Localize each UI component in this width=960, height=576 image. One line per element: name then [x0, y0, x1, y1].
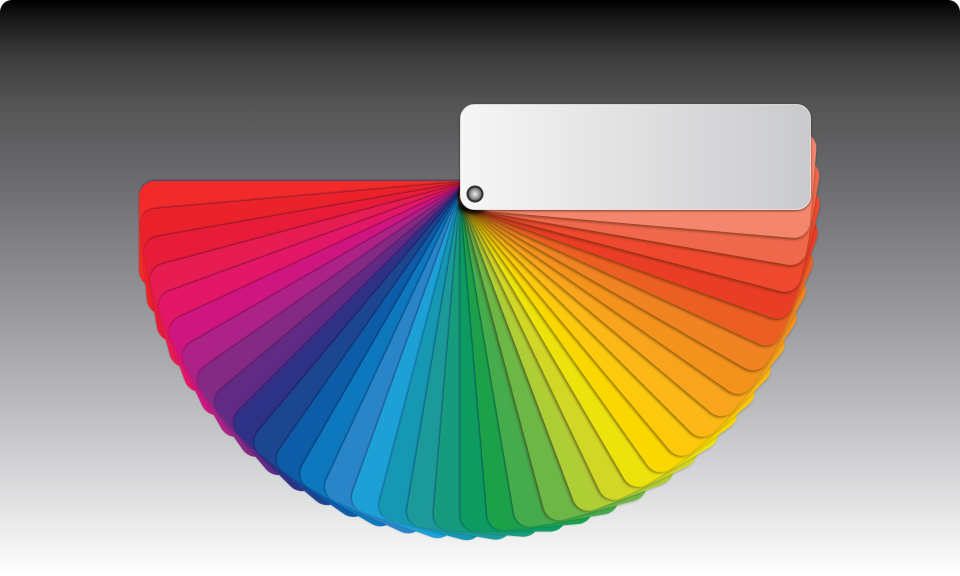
card: sky blue: [348, 176, 566, 543]
card: deep orange: [455, 109, 812, 376]
card: coral: [458, 103, 822, 268]
card: lemon: [455, 136, 724, 493]
card: orange: [454, 112, 803, 400]
card: purple magenta: [191, 175, 540, 463]
card: red orange: [457, 103, 823, 295]
card: golden yellow: [454, 125, 761, 462]
colour fan: [139, 103, 823, 544]
card: red: [139, 181, 490, 287]
swatch body: [460, 104, 810, 210]
card: leaf green: [457, 157, 650, 524]
blank swatch card: [458, 104, 810, 213]
card: rose red: [147, 178, 513, 371]
card: mid green: [458, 165, 621, 529]
card: yellow green: [455, 143, 702, 505]
rivet: [466, 186, 484, 202]
card: lime: [456, 149, 678, 515]
card: burnt orange: [455, 106, 818, 351]
card: cyan blue: [376, 177, 567, 544]
hub shadow: [458, 201, 488, 213]
card: magenta: [177, 175, 534, 443]
card: purple: [208, 175, 545, 482]
card: magenta rose: [164, 176, 527, 420]
card: light orange: [454, 116, 791, 423]
card: dark blue: [270, 175, 559, 523]
card: emerald: [460, 180, 566, 532]
card: mid blue: [320, 176, 564, 539]
card: indigo: [227, 175, 550, 498]
card: navy: [248, 175, 555, 512]
card: blue: [294, 175, 562, 532]
card: yellow: [455, 130, 743, 478]
card: sea green: [432, 179, 567, 538]
card: salmon: [459, 103, 818, 239]
card: teal: [405, 178, 568, 542]
card: amber: [454, 120, 777, 443]
card: vermilion: [456, 104, 822, 323]
card: scarlet: [139, 180, 498, 316]
card: green: [459, 173, 594, 532]
card: rose: [154, 177, 520, 396]
card: crimson: [142, 179, 506, 344]
